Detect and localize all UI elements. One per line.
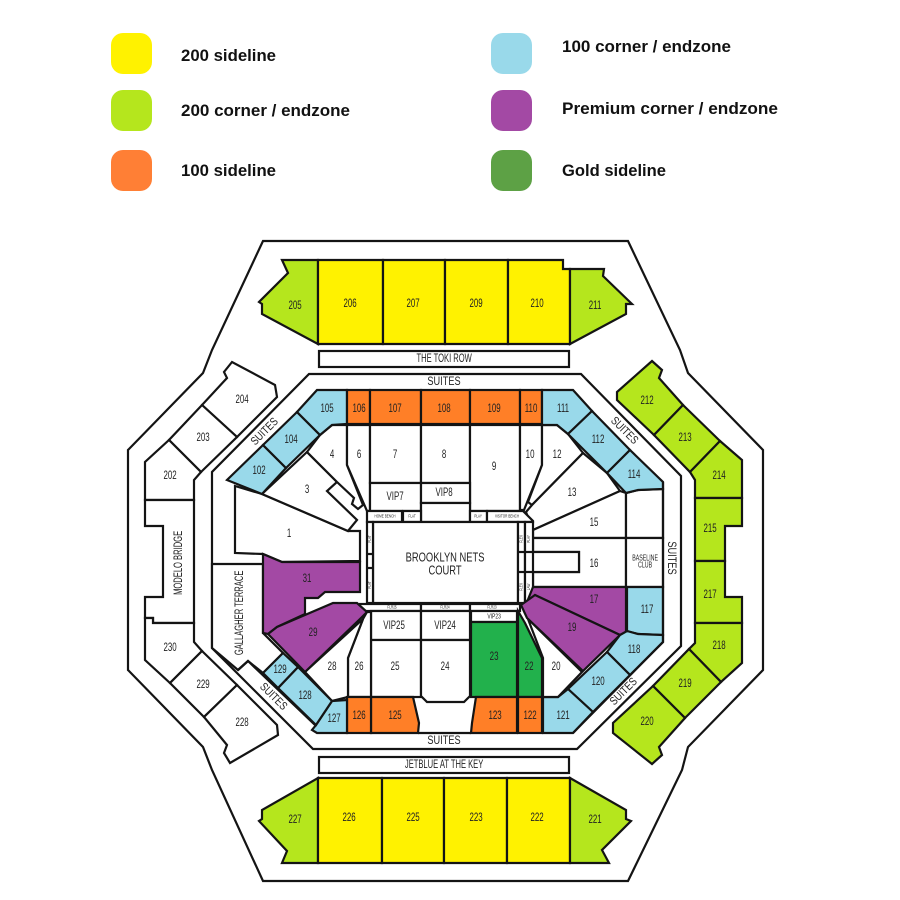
suites label upper right: SUITES	[608, 415, 640, 447]
section 218	[689, 623, 742, 682]
section 23	[471, 622, 517, 697]
section 6: 6	[357, 449, 362, 461]
legend item: 200 sideline	[111, 33, 276, 74]
section 112: 112	[592, 434, 605, 446]
suites label upper left: SUITES	[249, 416, 281, 448]
section 129: 129	[273, 664, 287, 676]
section 214	[690, 441, 742, 498]
section 221	[570, 778, 631, 863]
section 205: 205	[288, 300, 302, 312]
section 117: 117	[641, 604, 654, 616]
section VIP8	[421, 483, 470, 503]
The Toki Row	[319, 351, 569, 367]
section 202	[145, 440, 201, 500]
section 20: 20	[552, 661, 561, 673]
flat left	[403, 511, 421, 522]
legend item: 100 sideline	[111, 150, 276, 191]
section 223	[444, 778, 507, 863]
section VIP24: VIP24	[434, 620, 456, 632]
right floor strips: FLEX	[519, 535, 524, 543]
section 110	[520, 390, 542, 424]
section 7: 7	[393, 449, 398, 461]
floor row 23	[470, 604, 520, 611]
lower left suites divider	[238, 661, 315, 725]
section 22	[518, 611, 542, 697]
section 109: 109	[487, 403, 501, 415]
section 9: 9	[492, 461, 497, 473]
The Toki Row: THE TOKI ROW	[416, 353, 472, 365]
Gallagher Terrace: GALLAGHER TERRACE	[234, 570, 246, 655]
section 107	[370, 390, 421, 424]
section 19: 19	[568, 622, 577, 634]
floor row 25	[360, 604, 421, 611]
section 214: 214	[712, 470, 726, 482]
court: BROOKLYN NETS	[406, 551, 485, 565]
section 226: 226	[342, 812, 356, 824]
section 26	[348, 612, 371, 697]
section 207: 207	[406, 298, 420, 310]
unnamed box above baseline club	[626, 489, 663, 538]
section 10	[520, 425, 542, 510]
flat left: FLAT	[408, 514, 416, 519]
section 109	[470, 390, 520, 424]
section 230	[145, 618, 202, 683]
section 229	[170, 651, 237, 717]
section 227: 227	[288, 814, 302, 826]
section 202: 202	[163, 470, 177, 482]
section VIP7	[370, 483, 421, 511]
section 209	[445, 260, 508, 344]
section 222: 222	[530, 812, 544, 824]
section 106	[347, 390, 370, 424]
section VIP23	[471, 611, 517, 622]
court	[373, 522, 518, 603]
section 104: 104	[284, 434, 298, 446]
right floor strips: LAW	[527, 583, 531, 590]
section 31	[263, 554, 360, 634]
section 217: 217	[703, 589, 717, 601]
lower bowl	[227, 390, 663, 733]
section 23: 23	[490, 651, 499, 663]
Baseline Club	[626, 538, 663, 587]
section 25	[371, 640, 421, 697]
arena outer boundary	[128, 241, 763, 881]
legend item: Premium corner / endzone: Premium corner / endzone	[562, 100, 778, 118]
section 24	[421, 640, 470, 702]
section 220: 220	[640, 716, 654, 728]
section 114	[607, 450, 663, 493]
legend item: Gold sideline: Gold sideline	[562, 162, 666, 180]
Baseline Club: CLUB	[638, 561, 652, 570]
section 219	[653, 649, 721, 718]
section 228	[204, 685, 278, 763]
legend	[111, 33, 778, 191]
section 223: 223	[469, 812, 483, 824]
section 16: 16	[590, 558, 599, 570]
section VIP23: VIP23	[487, 612, 501, 621]
section 9	[470, 425, 520, 511]
section 4	[307, 425, 363, 509]
section 25: 25	[391, 661, 400, 673]
section 13: 13	[568, 487, 577, 499]
section VIP25	[371, 611, 421, 640]
section 127: 127	[327, 713, 341, 725]
section 126: 126	[352, 710, 366, 722]
section 123: 123	[488, 710, 502, 722]
section VIP7: VIP7	[386, 491, 404, 503]
section 211	[570, 269, 632, 344]
section VIP24	[421, 611, 470, 640]
home bench: HOME BENCH	[375, 514, 396, 519]
section 12: 12	[553, 449, 562, 461]
section 29	[268, 603, 367, 672]
section 106: 106	[352, 403, 366, 415]
section 215	[695, 498, 742, 561]
legend item: 200 corner / endzone: 200 corner / endzone	[181, 102, 350, 120]
legend item: 100 corner / endzone	[491, 33, 731, 74]
section 3	[262, 452, 357, 531]
left floor strip: FLAT	[368, 535, 372, 543]
suites label lower right: SUITES	[608, 676, 640, 708]
section 211: 211	[589, 300, 602, 312]
section 28: 28	[328, 661, 337, 673]
section 215: 215	[703, 523, 717, 535]
section 118	[607, 631, 663, 675]
suites label right: SUITES	[665, 541, 677, 575]
legend item: 100 sideline: 100 sideline	[181, 162, 276, 180]
section 125	[371, 697, 419, 733]
section 206	[318, 260, 383, 344]
section 213	[654, 405, 720, 472]
section 20	[528, 619, 582, 697]
Modelo Bridge	[145, 500, 194, 623]
Baseline Club: BASELINE	[632, 554, 658, 563]
left floor strip	[367, 522, 373, 603]
right upper sections	[613, 361, 742, 764]
section 108: 108	[437, 403, 451, 415]
section 221: 221	[588, 814, 602, 826]
court: COURT	[428, 564, 462, 578]
floor row 24: FLR24	[440, 605, 450, 610]
right floor strips: FLEX	[519, 583, 524, 591]
section 217	[695, 561, 742, 623]
seating map	[128, 241, 763, 881]
section 122	[518, 697, 542, 733]
section 219: 219	[678, 678, 692, 690]
section 15: 15	[590, 517, 599, 529]
JetBlue at the Key	[319, 757, 569, 773]
suites label bottom: SUITES	[427, 735, 461, 747]
section 19	[521, 595, 620, 671]
legend item: Premium corner / endzone	[491, 90, 778, 131]
section 110: 110	[525, 403, 538, 415]
left upper sections	[145, 362, 278, 763]
section 102	[227, 445, 286, 494]
section 107: 107	[388, 403, 402, 415]
section 225: 225	[406, 812, 420, 824]
section 16	[533, 538, 626, 587]
section 17: 17	[590, 594, 599, 606]
section 126	[347, 697, 371, 733]
visitor bench: VISITOR BENCH	[495, 514, 519, 519]
section 127	[312, 700, 347, 733]
home bench	[367, 511, 402, 522]
section 8	[421, 425, 470, 483]
section 125: 125	[388, 710, 402, 722]
right floor strips: PLAY	[527, 535, 531, 543]
section 210: 210	[530, 298, 544, 310]
suites label lower left: SUITES	[257, 681, 289, 713]
section 4: 4	[330, 449, 335, 461]
box beside 16	[525, 552, 579, 572]
section 22: 22	[525, 661, 534, 673]
floor row 24	[421, 604, 470, 611]
section 105: 105	[320, 403, 334, 415]
legend item: Gold sideline	[491, 150, 666, 191]
section 13	[526, 453, 620, 530]
right floor strips	[518, 522, 533, 603]
play	[470, 511, 487, 522]
section 218: 218	[712, 640, 726, 652]
section 121	[543, 689, 593, 733]
section 123	[471, 697, 517, 733]
section 209: 209	[469, 298, 483, 310]
floor row 23: FLR23	[487, 605, 497, 610]
section 121: 121	[556, 710, 570, 722]
upper sideline sections bottom	[259, 778, 631, 863]
section 1: 1	[287, 528, 292, 540]
left floor strip: FLAT	[368, 581, 372, 589]
section 114: 114	[628, 469, 641, 481]
section 26: 26	[355, 661, 364, 673]
section 12	[528, 425, 583, 505]
section 227	[259, 778, 318, 863]
suites label top: SUITES	[427, 376, 461, 388]
legend item: 200 sideline: 200 sideline	[181, 47, 276, 65]
section 222	[507, 778, 570, 863]
section 118: 118	[628, 644, 641, 656]
section 6	[347, 425, 370, 511]
section 122: 122	[523, 710, 537, 722]
section 111	[542, 390, 592, 434]
section 112	[568, 411, 630, 473]
section 105	[297, 390, 347, 435]
section 120: 120	[591, 676, 605, 688]
section 204: 204	[235, 394, 249, 406]
section 8: 8	[442, 449, 447, 461]
play: PLAY	[474, 514, 482, 519]
section 10: 10	[526, 449, 535, 461]
section 129	[263, 653, 298, 688]
section 220	[613, 686, 685, 764]
section 128	[278, 667, 332, 725]
section 7	[370, 425, 421, 483]
JetBlue at the Key: JETBLUE AT THE KEY	[405, 759, 484, 771]
section 3: 3	[305, 484, 310, 496]
section 111: 111	[557, 403, 569, 415]
section 17	[527, 587, 626, 635]
section 24: 24	[441, 661, 450, 673]
section 213: 213	[678, 432, 692, 444]
section 212	[617, 361, 683, 435]
lower bowl wall lines	[418, 732, 471, 734]
section 104	[263, 412, 320, 468]
visitor bench	[487, 511, 533, 522]
suites ring	[212, 374, 681, 749]
section 228: 228	[235, 717, 249, 729]
section 203	[169, 405, 237, 472]
section 117	[627, 587, 663, 635]
section 210	[508, 260, 570, 344]
section 102: 102	[252, 465, 266, 477]
section 28	[305, 619, 363, 701]
section 206: 206	[343, 298, 357, 310]
box under VIP8	[421, 503, 470, 522]
section 229: 229	[196, 679, 210, 691]
section VIP25: VIP25	[383, 620, 405, 632]
Gallagher Terrace	[212, 564, 283, 673]
section 29: 29	[309, 627, 318, 639]
legend item: 200 corner / endzone	[111, 90, 350, 131]
section 225	[382, 778, 444, 863]
section 204	[202, 362, 277, 437]
section 15	[533, 491, 626, 538]
section 207	[383, 260, 445, 344]
section 128: 128	[298, 690, 312, 702]
legend item: 100 corner / endzone: 100 corner / endzone	[562, 38, 731, 56]
section 205	[259, 260, 318, 344]
Modelo Bridge: MODELO BRIDGE	[173, 530, 185, 595]
section 120	[568, 652, 630, 712]
section 212: 212	[640, 395, 654, 407]
section 226	[318, 778, 382, 863]
floor row 25: FLR25	[387, 605, 397, 610]
section 31: 31	[303, 573, 312, 585]
upper sideline sections top	[259, 260, 632, 344]
section 230: 230	[163, 642, 177, 654]
section 1	[235, 486, 360, 562]
section 203: 203	[196, 432, 210, 444]
section VIP8: VIP8	[435, 487, 453, 499]
section 108	[421, 390, 470, 424]
